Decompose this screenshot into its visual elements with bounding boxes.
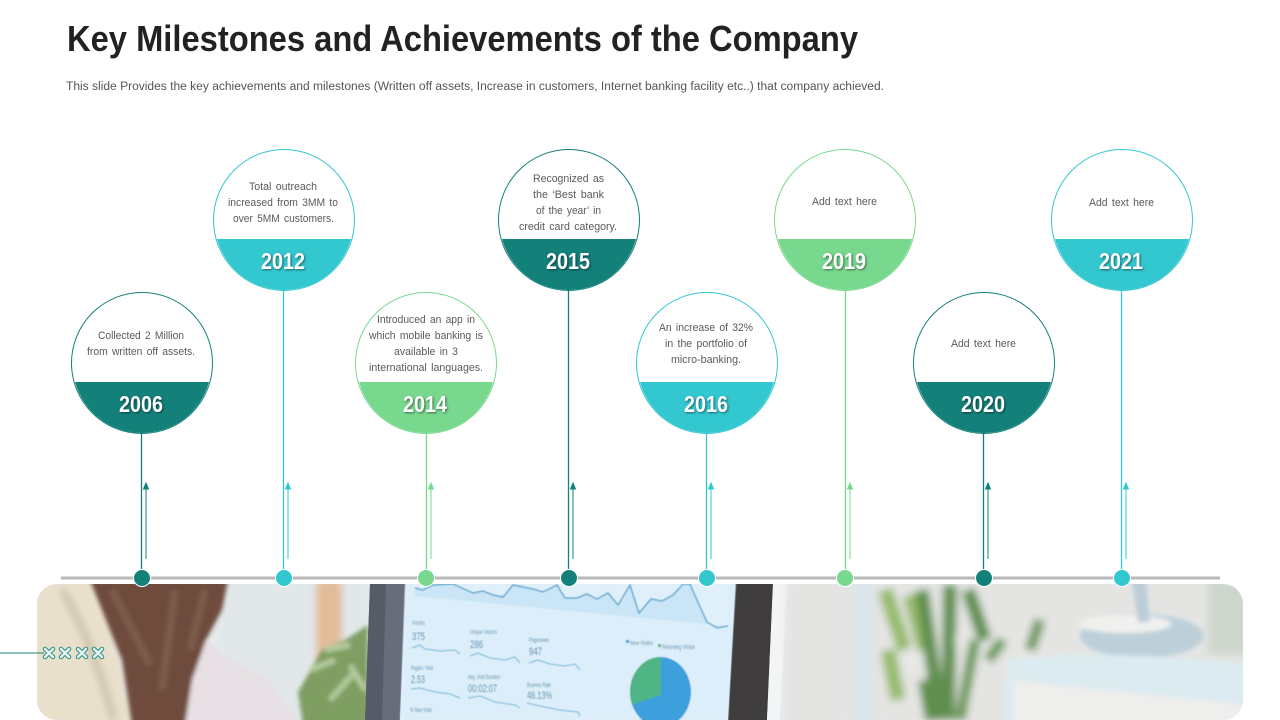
arrow 2014 (428, 483, 434, 559)
milestone 2016: An increase of 32% (659, 322, 753, 334)
milestone 2020 (914, 292, 1054, 586)
milestone 2019: 2019 (822, 248, 866, 274)
milestone 2014: Introduced an app in (377, 314, 475, 326)
milestone 2015 (498, 150, 640, 586)
milestone 2019: Add text here (812, 196, 877, 208)
milestone 2021: Add text here (1089, 197, 1154, 209)
monitor screen with analytics: 286 (470, 639, 483, 651)
monitor screen with analytics: Bounce Rate (527, 682, 551, 689)
milestone 2012: over 5MM customers. (233, 213, 334, 225)
monitor screen with analytics (400, 584, 736, 720)
milestone 2015: the ‘Best bank (533, 189, 604, 201)
milestone 2014 (356, 292, 496, 586)
milestone 2021 (1052, 150, 1192, 586)
woman: hair and blouse (175, 640, 302, 720)
arrow 2021 (1124, 483, 1128, 559)
milestone 2015: Recognized as (533, 173, 604, 185)
milestone 2006 (72, 292, 212, 586)
milestone 2015: of the year’ in (536, 205, 601, 217)
monitor screen with analytics: 375 (412, 631, 425, 643)
monitor screen with analytics: % New Visits (410, 707, 432, 714)
title: Key Milestones and Achievements of the Company (67, 18, 858, 59)
arrow 2012 (286, 483, 290, 559)
monitor screen with analytics: Unique Visitors (470, 629, 497, 636)
milestone 2015: 2015 (546, 248, 590, 274)
milestone 2016: 2016 (684, 391, 728, 417)
milestone 2012: 2012 (261, 248, 305, 274)
monitor screen with analytics: 2.53 (411, 674, 425, 686)
milestone 2006: 2006 (119, 391, 163, 417)
monitor screen with analytics: 947 (529, 646, 542, 658)
milestone 2014: which mobile banking is (368, 330, 483, 342)
photo: office worker at analytics monitor (25, 580, 1248, 720)
milestone 2012 (214, 150, 354, 586)
subtitle: This slide Provides the key achievements and milestones (Written off assets, Increase in customers, Internet banking facility etc..) that company achieved. (66, 81, 884, 93)
milestone 2019 (774, 150, 916, 586)
milestone 2020: Add text here (951, 338, 1016, 350)
milestone 2016: micro-banking. (671, 354, 741, 366)
monitor frame (365, 584, 406, 720)
monitor screen with analytics: Avg. Visit Duration (468, 674, 500, 681)
milestone 2015: credit card category. (519, 221, 617, 233)
monitor screen with analytics: Visits (412, 620, 426, 627)
milestone 2016 (636, 292, 778, 586)
milestone 2014: 2014 (403, 391, 447, 417)
monitor screen with analytics: Returning Visitor (662, 644, 696, 651)
milestone 2006: from written off assets. (87, 346, 195, 358)
milestone 2012: increased from 3MM to (228, 197, 338, 209)
monitor screen with analytics: Pageviews (529, 637, 549, 644)
monitor screen with analytics: Pages / Visit (411, 665, 433, 672)
milestone 2012: Total outreach (249, 181, 317, 193)
timeline baseline (61, 576, 1220, 580)
milestone 2021: 2021 (1099, 248, 1143, 274)
decorative leader with four x marks (0, 649, 102, 657)
milestone 2016: in the portfolio of (665, 338, 748, 350)
milestone 2020: 2020 (961, 391, 1005, 417)
milestone 2014: available in 3 (394, 346, 458, 358)
milestone 2006: Collected 2 Million (98, 330, 184, 342)
arrow 2006 (144, 483, 148, 559)
monitor screen with analytics: New Visitor (630, 640, 654, 647)
monitor screen with analytics: 00:02:07 (468, 683, 497, 695)
arrow 2019 (848, 483, 852, 559)
arrow 2016 (708, 483, 714, 559)
arrow 2015 (570, 483, 576, 559)
monitor screen with analytics: 46.13% (527, 690, 552, 702)
arrow 2020 (986, 483, 990, 559)
milestone 2014: international languages. (369, 362, 483, 374)
